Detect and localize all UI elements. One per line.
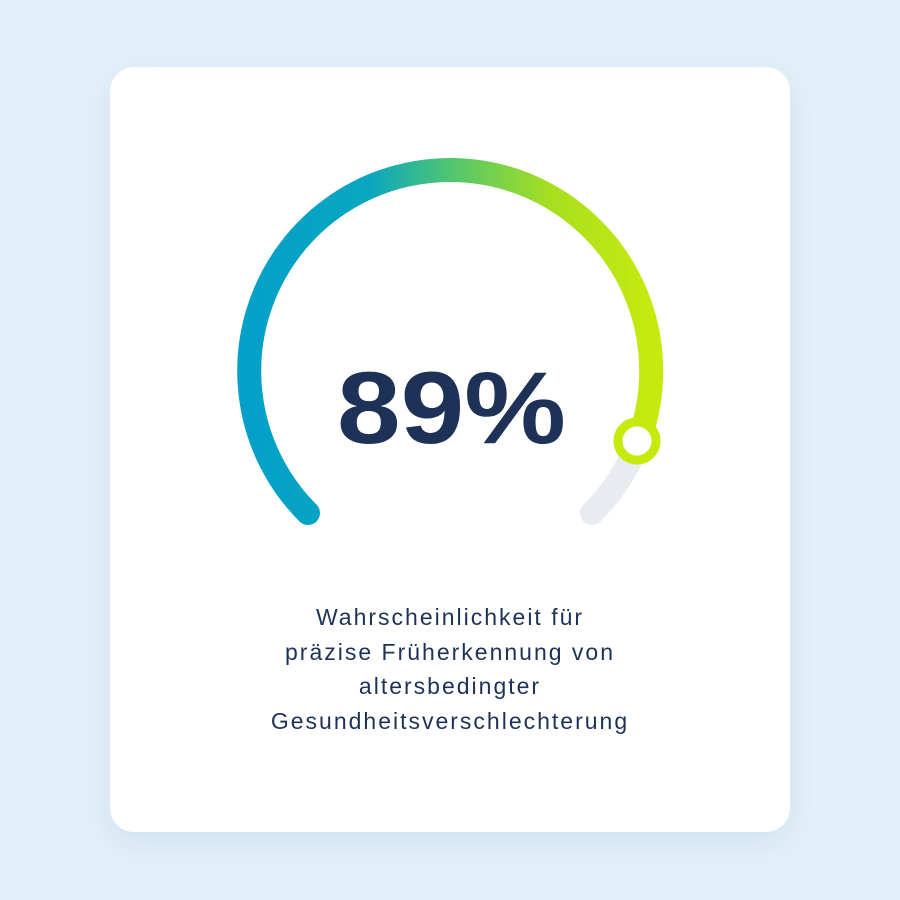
panel: card <box>110 67 790 832</box>
gauge track remainder <box>592 440 639 513</box>
caption text: altersbedingter <box>359 673 541 699</box>
big number: 89% <box>337 351 566 465</box>
caption text: präzise Früherkennung von <box>285 638 615 664</box>
gauge knob <box>618 422 656 460</box>
gauge value arc <box>249 170 651 513</box>
caption text: Gesundheitsverschlechterung <box>271 708 629 734</box>
caption text <box>271 604 629 734</box>
caption text: Wahrscheinlichkeit für <box>316 604 584 630</box>
